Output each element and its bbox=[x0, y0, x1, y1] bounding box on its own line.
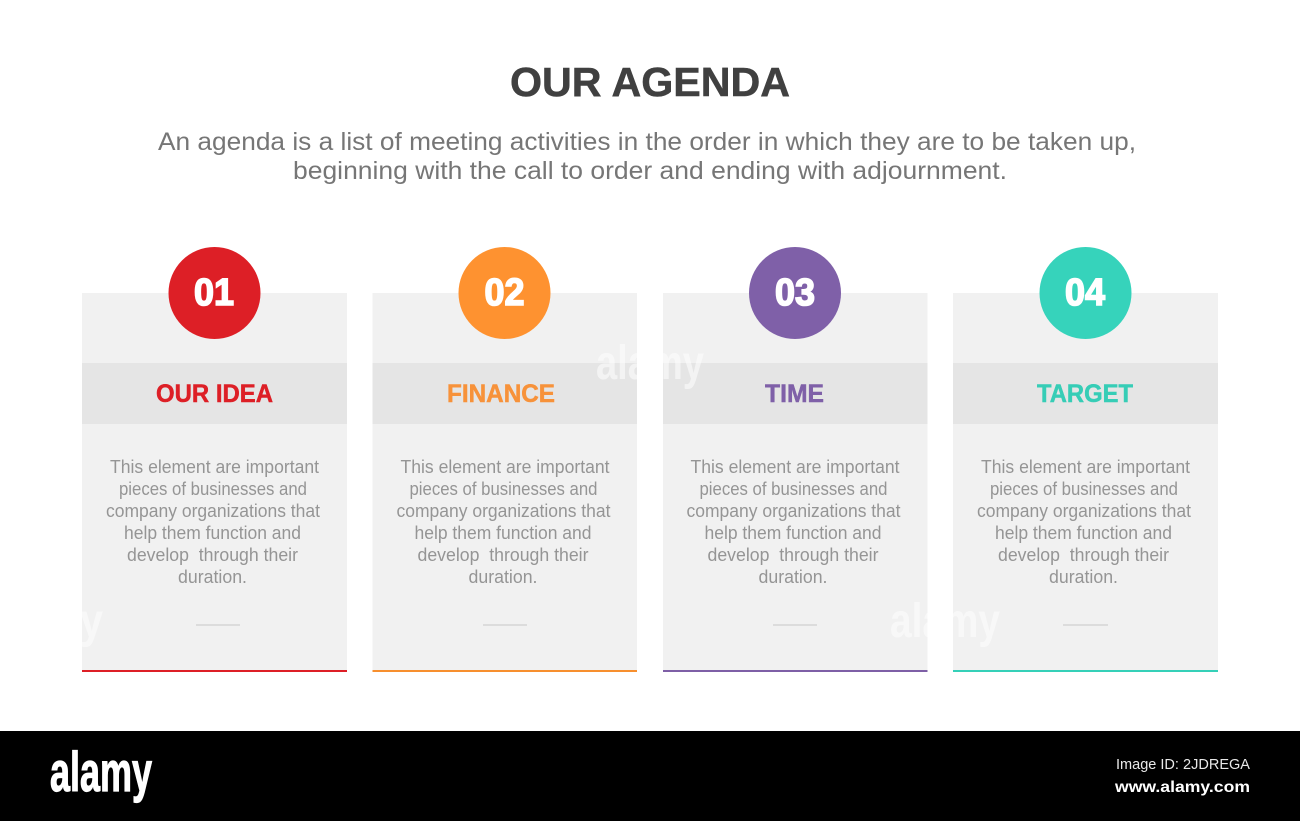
watermark overlays: alamy bbox=[890, 595, 1000, 648]
body text: help them function and bbox=[995, 523, 1172, 543]
footer logo: alamy bbox=[50, 740, 152, 803]
subtitle text bbox=[158, 128, 1136, 185]
number badge 02: 02 bbox=[484, 272, 524, 314]
website: www.alamy.com bbox=[1114, 779, 1250, 796]
number badge 01: 01 bbox=[194, 272, 234, 314]
number badge 04 bbox=[1040, 247, 1132, 339]
heading band bbox=[372, 363, 637, 424]
card background bbox=[953, 293, 1218, 672]
body text: duration. bbox=[1049, 567, 1118, 587]
watermark overlays: y bbox=[80, 595, 103, 648]
panel: target bbox=[953, 247, 1218, 672]
heading band bbox=[953, 363, 1218, 424]
body text: This element are important bbox=[981, 457, 1190, 477]
body text: This element are important bbox=[690, 457, 900, 477]
body text: This element are important bbox=[400, 457, 610, 477]
body text: This element are important bbox=[110, 457, 319, 477]
subtitle text: beginning with the call to order and ending with adjournment. bbox=[293, 157, 1007, 185]
body text: company organizations that bbox=[977, 501, 1191, 521]
body text: duration. bbox=[468, 567, 538, 587]
heading: target: TARGET bbox=[1037, 380, 1133, 408]
body text: help them function and bbox=[414, 523, 592, 543]
card background bbox=[82, 293, 347, 672]
panel: our idea bbox=[82, 247, 347, 672]
body text: pieces of businesses and bbox=[700, 479, 888, 499]
body text bbox=[396, 457, 610, 587]
watermark overlays: alamy bbox=[596, 337, 704, 390]
body text: develop through their bbox=[998, 545, 1169, 565]
heading band bbox=[82, 363, 347, 424]
number badge 04: 04 bbox=[1065, 272, 1105, 314]
card background bbox=[372, 293, 637, 672]
bottom accent line bbox=[953, 670, 1218, 672]
body text: duration. bbox=[758, 567, 828, 587]
body text: company organizations that bbox=[686, 501, 900, 521]
body text: company organizations that bbox=[106, 501, 320, 521]
body text: develop through their bbox=[127, 545, 298, 565]
number badge 02 bbox=[458, 247, 550, 339]
bottom accent line bbox=[372, 670, 637, 672]
heading: finance: FINANCE bbox=[447, 380, 555, 408]
heading: time: TIME bbox=[765, 380, 824, 408]
body text bbox=[977, 457, 1191, 587]
bottom accent line bbox=[82, 670, 347, 672]
body text: develop through their bbox=[418, 545, 589, 565]
subtitle text: An agenda is a list of meeting activities in the order in which they are to be taken up, bbox=[158, 128, 1136, 156]
watermark overlays bbox=[80, 337, 1000, 648]
body text: pieces of businesses and bbox=[119, 479, 307, 499]
panel: finance bbox=[372, 247, 637, 672]
body text: company organizations that bbox=[396, 501, 610, 521]
panel: time bbox=[663, 247, 928, 672]
body text bbox=[686, 457, 900, 587]
title: OUR AGENDA bbox=[510, 59, 790, 105]
body text bbox=[106, 457, 320, 587]
body text: pieces of businesses and bbox=[410, 479, 598, 499]
bottom accent line bbox=[663, 670, 928, 672]
number badge 03: 03 bbox=[775, 272, 815, 314]
card background bbox=[663, 293, 928, 672]
body text: help them function and bbox=[704, 523, 882, 543]
footer bar bbox=[0, 731, 1300, 821]
heading band bbox=[663, 363, 928, 424]
number badge 01 bbox=[168, 247, 260, 339]
image id: Image ID: 2JDREGA bbox=[1116, 756, 1250, 773]
body text: duration. bbox=[178, 567, 247, 587]
body text: pieces of businesses and bbox=[990, 479, 1178, 499]
heading: our idea: OUR IDEA bbox=[156, 380, 273, 408]
body text: develop through their bbox=[708, 545, 879, 565]
body text: help them function and bbox=[124, 523, 301, 543]
number badge 03 bbox=[749, 247, 841, 339]
